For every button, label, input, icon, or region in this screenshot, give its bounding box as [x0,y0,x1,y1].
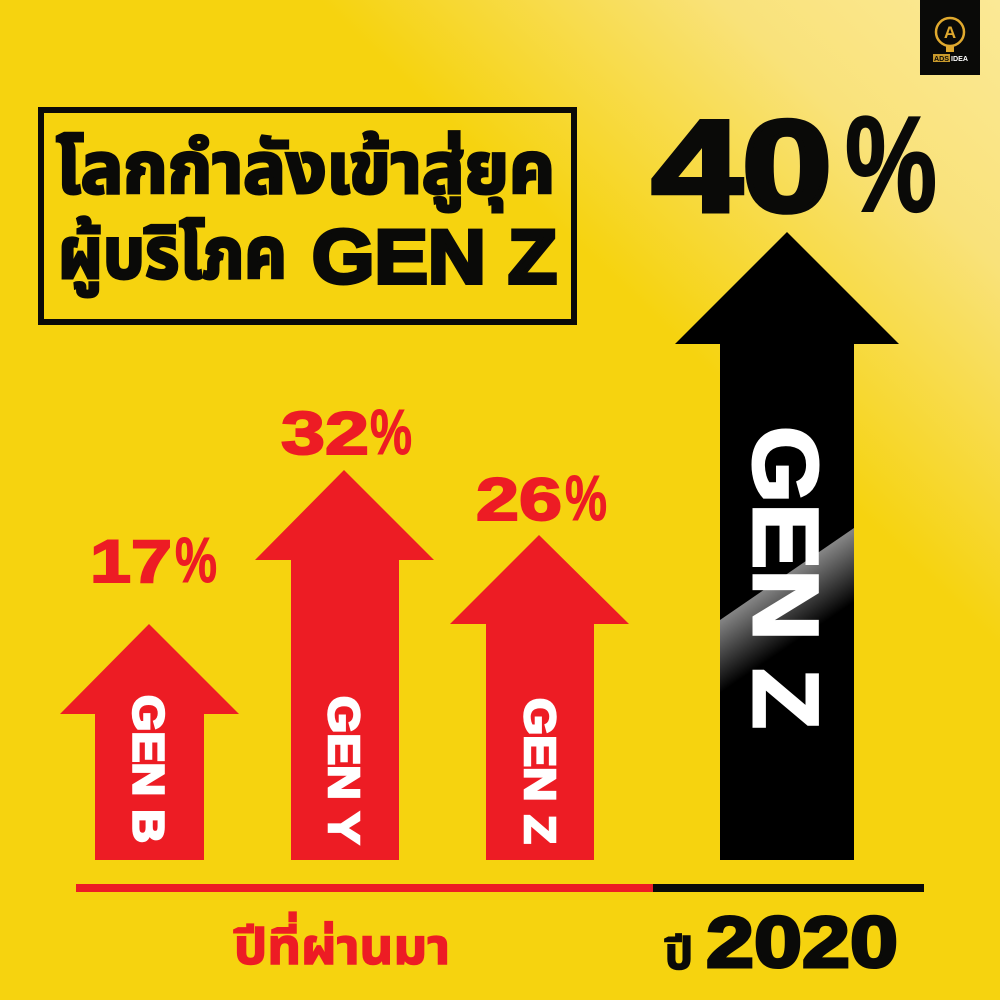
arrow shine [720,528,854,860]
title line 2 [58,214,557,300]
arrow: Gen Y [255,470,434,860]
value 17%: % [175,524,217,596]
logo badge: ADS [934,56,949,63]
title line 2: ผู้บริโภค [58,214,287,297]
timeline 2020 [653,884,924,892]
value 26%: % [565,462,607,534]
title line 1: โลกกำลังเข้าสู่ยุค [56,129,555,212]
label year 2020: 2020 [706,903,898,983]
value 26% [476,462,607,534]
value 32% [281,396,412,468]
arrow: Gen Z [450,535,629,860]
big percentage 40% [652,88,937,240]
value 17% [90,524,217,596]
label Gen B: GEN B [124,695,172,843]
value 32%: 32 [281,400,369,467]
logo badge [920,0,980,75]
label year 2020: ปี [664,930,693,979]
value 32%: % [370,396,412,468]
big percentage 40%: 40 [652,93,832,239]
timeline past [76,884,653,892]
big percentage 40%: % [845,88,937,240]
arrow label: GEN Z [734,426,836,729]
label Gen Y: GEN Y [319,696,368,844]
label past years: ปีที่ผ่านมา [234,912,450,975]
logo badge: A [944,23,956,42]
title box [41,110,574,322]
title line 2: GEN Z [312,215,557,300]
arrow: Gen Z 2020 [675,232,899,860]
label year 2020 [664,903,898,983]
label Gen Z: GEN Z [515,698,564,844]
arrow: Gen B [60,624,239,860]
value 17%: 17 [90,528,172,595]
value 26%: 26 [476,466,562,533]
logo badge: IDEA [951,56,968,63]
